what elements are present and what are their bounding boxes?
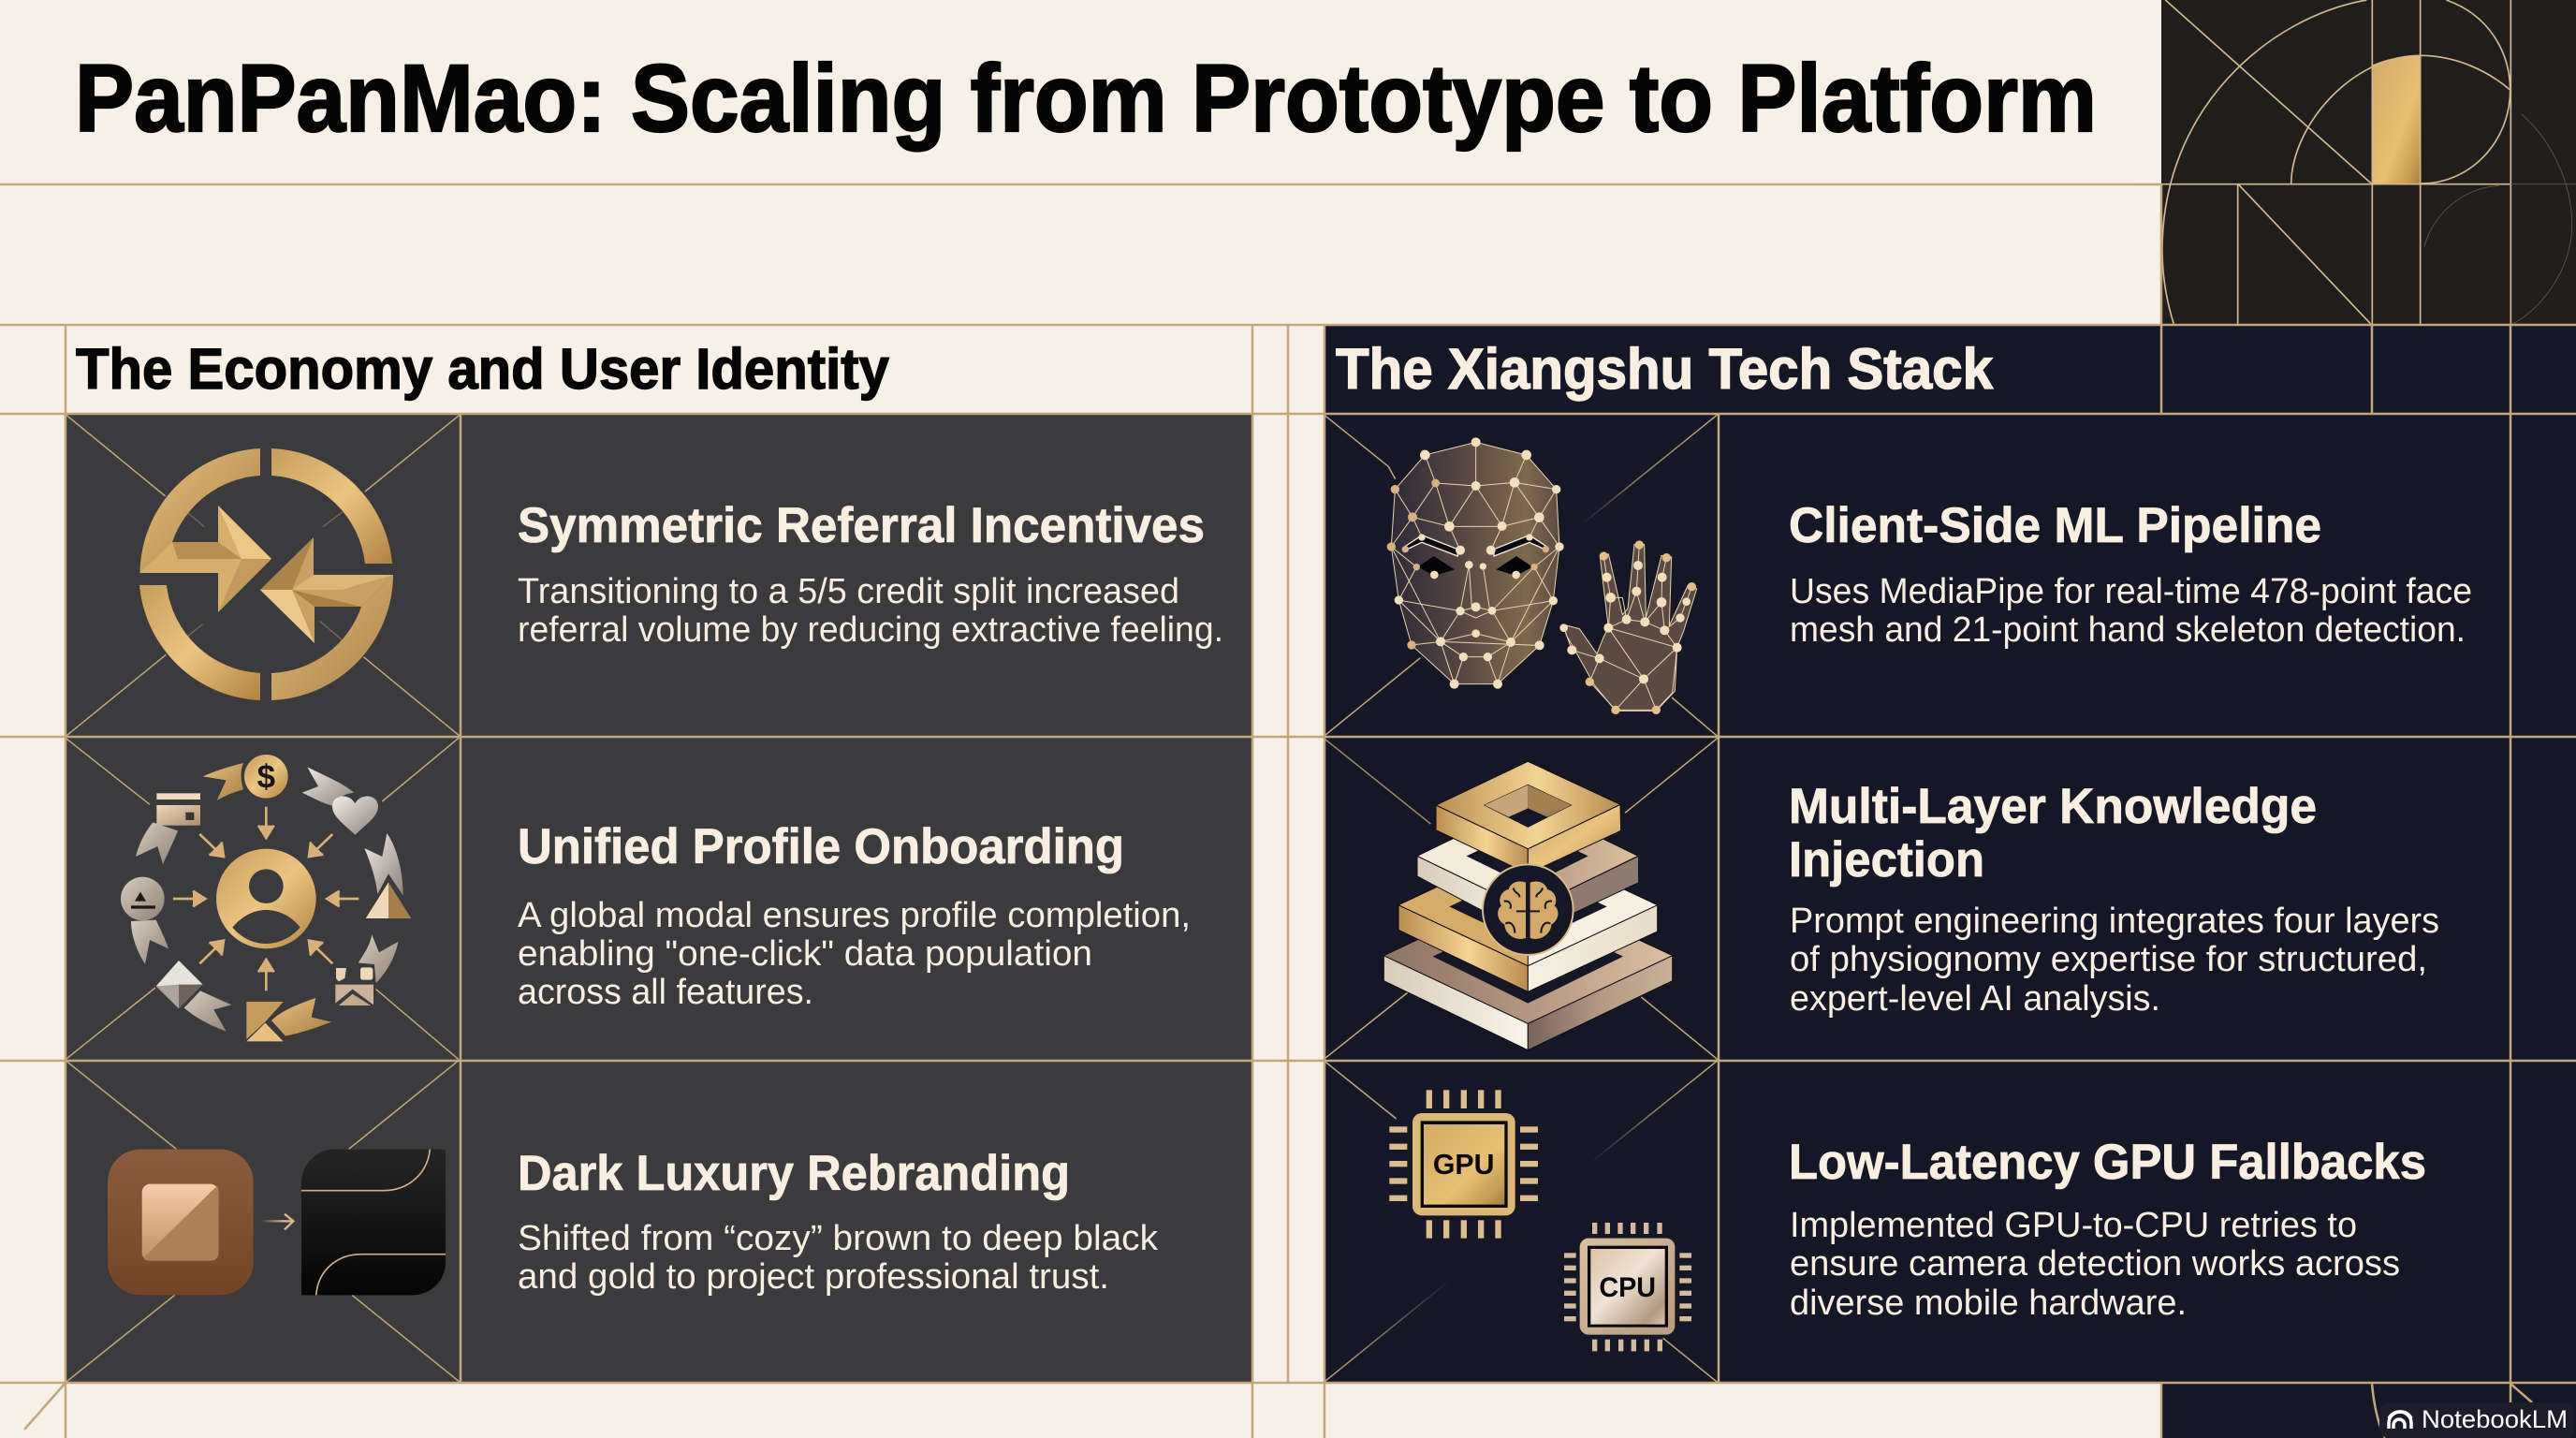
icon: dollar coin [203, 755, 288, 800]
icon: dollar coin: $ [257, 759, 275, 796]
text block: Dark Luxury Rebranding: Dark Luxury Rebranding [518, 1146, 1070, 1201]
text block: Multi-Layer Knowledge Injection: Injection [1789, 832, 1984, 888]
text block: Multi-Layer Knowledge Injection: expert-level AI analysis. [1790, 979, 2160, 1019]
icon: credit card [136, 793, 200, 864]
icon: triangle [364, 833, 411, 918]
panel: left charcoal column background [66, 414, 1252, 1383]
text block: Client-Side ML Pipeline: mesh and 21-point hand skeleton detection. [1790, 610, 2466, 650]
watermark: NotebookLM: NotebookLM [2422, 1405, 2568, 1433]
text block: Dark Luxury Rebranding: and gold to project professional trust. [518, 1257, 1109, 1297]
text block: Multi-Layer Knowledge Injection: Prompt engineering integrates four layers [1790, 902, 2439, 941]
text block: Symmetric Referral Incentives [518, 498, 1223, 650]
text block: Low-Latency GPU Fallbacks: Implemented GPU-to-CPU retries to [1790, 1206, 2357, 1245]
text block: Low-Latency GPU Fallbacks: Low-Latency GPU Fallbacks [1789, 1135, 2426, 1190]
text block: Symmetric Referral Incentives: Transitioning to a 5/5 credit split increased [518, 572, 1179, 611]
icon: CPU chip [1564, 1223, 1691, 1351]
icon: angular mark [246, 998, 331, 1041]
text block: Unified Profile Onboarding: A global modal ensures profile completion, [518, 896, 1191, 935]
hand skeleton [1559, 540, 1697, 714]
text block: Unified Profile Onboarding: Unified Profile Onboarding [518, 819, 1124, 874]
brain badge [1483, 864, 1573, 955]
heading: right section: The Xiangshu Tech Stack [1336, 337, 1993, 401]
text block: Client-Side ML Pipeline: Client-Side ML Pipeline [1789, 498, 2321, 553]
icon: brown app tile [108, 1150, 254, 1295]
layer 4 [1383, 888, 1673, 1050]
text block: Low-Latency GPU Fallbacks [1789, 1135, 2426, 1323]
panel: bottom-right navy strip [2162, 1383, 2576, 1438]
icon: brown to black rebrand [66, 1061, 461, 1383]
panel: right navy column background [1325, 325, 2576, 1383]
icon: medal coin [121, 877, 168, 964]
text block: Symmetric Referral Incentives: referral volume by reducing extractive feeling. [518, 610, 1223, 650]
icon: GPU chip: GPU [1433, 1149, 1494, 1181]
icon: GPU chip [1389, 1090, 1538, 1239]
panel: top-right geometric decoration [2134, 0, 2576, 325]
watermark: NotebookLM [2379, 1402, 2574, 1438]
text block: Multi-Layer Knowledge Injection: Multi-Layer Knowledge [1789, 779, 2317, 834]
icon: unified profile hub [66, 738, 459, 1060]
icon: layered knowledge stack with brain [1324, 738, 1718, 1060]
heading: left section: The Economy and User Identity [76, 337, 889, 401]
icon: GPU and CPU chips [1324, 1061, 1718, 1383]
text block: Unified Profile Onboarding [518, 819, 1191, 1012]
layer 2 [1417, 802, 1639, 934]
icon: heart [302, 767, 378, 835]
text block: Low-Latency GPU Fallbacks: ensure camera detection works across [1790, 1244, 2400, 1284]
icon: central profile [216, 849, 316, 948]
face mesh [1387, 437, 1564, 689]
text block: Unified Profile Onboarding: across all features. [518, 973, 813, 1012]
text block: Dark Luxury Rebranding [518, 1146, 1159, 1297]
text block: Dark Luxury Rebranding: Shifted from “cozy” brown to deep black [518, 1219, 1159, 1258]
icon: CPU chip: CPU [1599, 1272, 1656, 1303]
arrows into profile [173, 807, 359, 990]
arrow [260, 1214, 293, 1229]
title: PanPanMao: Scaling from Prototype to Platform [75, 45, 2097, 152]
icon: referral exchange ring [66, 415, 461, 737]
text block: Multi-Layer Knowledge Injection: of physiognomy expertise for structured, [1790, 940, 2427, 979]
icon: diamond [156, 961, 231, 1032]
text block: Client-Side ML Pipeline [1789, 498, 2472, 650]
text block: Low-Latency GPU Fallbacks: diverse mobile hardware. [1790, 1284, 2187, 1323]
icon: face mesh and hand skeleton [1324, 415, 1718, 737]
text block: Symmetric Referral Incentives: Symmetric Referral Incentives [518, 498, 1205, 553]
icon: black app tile [301, 1150, 446, 1295]
text block: Client-Side ML Pipeline: Uses MediaPipe for real-time 478-point face [1790, 572, 2472, 611]
layer 1 [1436, 761, 1621, 873]
text block: Unified Profile Onboarding: enabling "one-click" data population [518, 934, 1092, 974]
layer 3 [1398, 844, 1658, 991]
icon: photo frame [335, 934, 399, 1005]
text block: Multi-Layer Knowledge Injection [1789, 779, 2439, 1019]
